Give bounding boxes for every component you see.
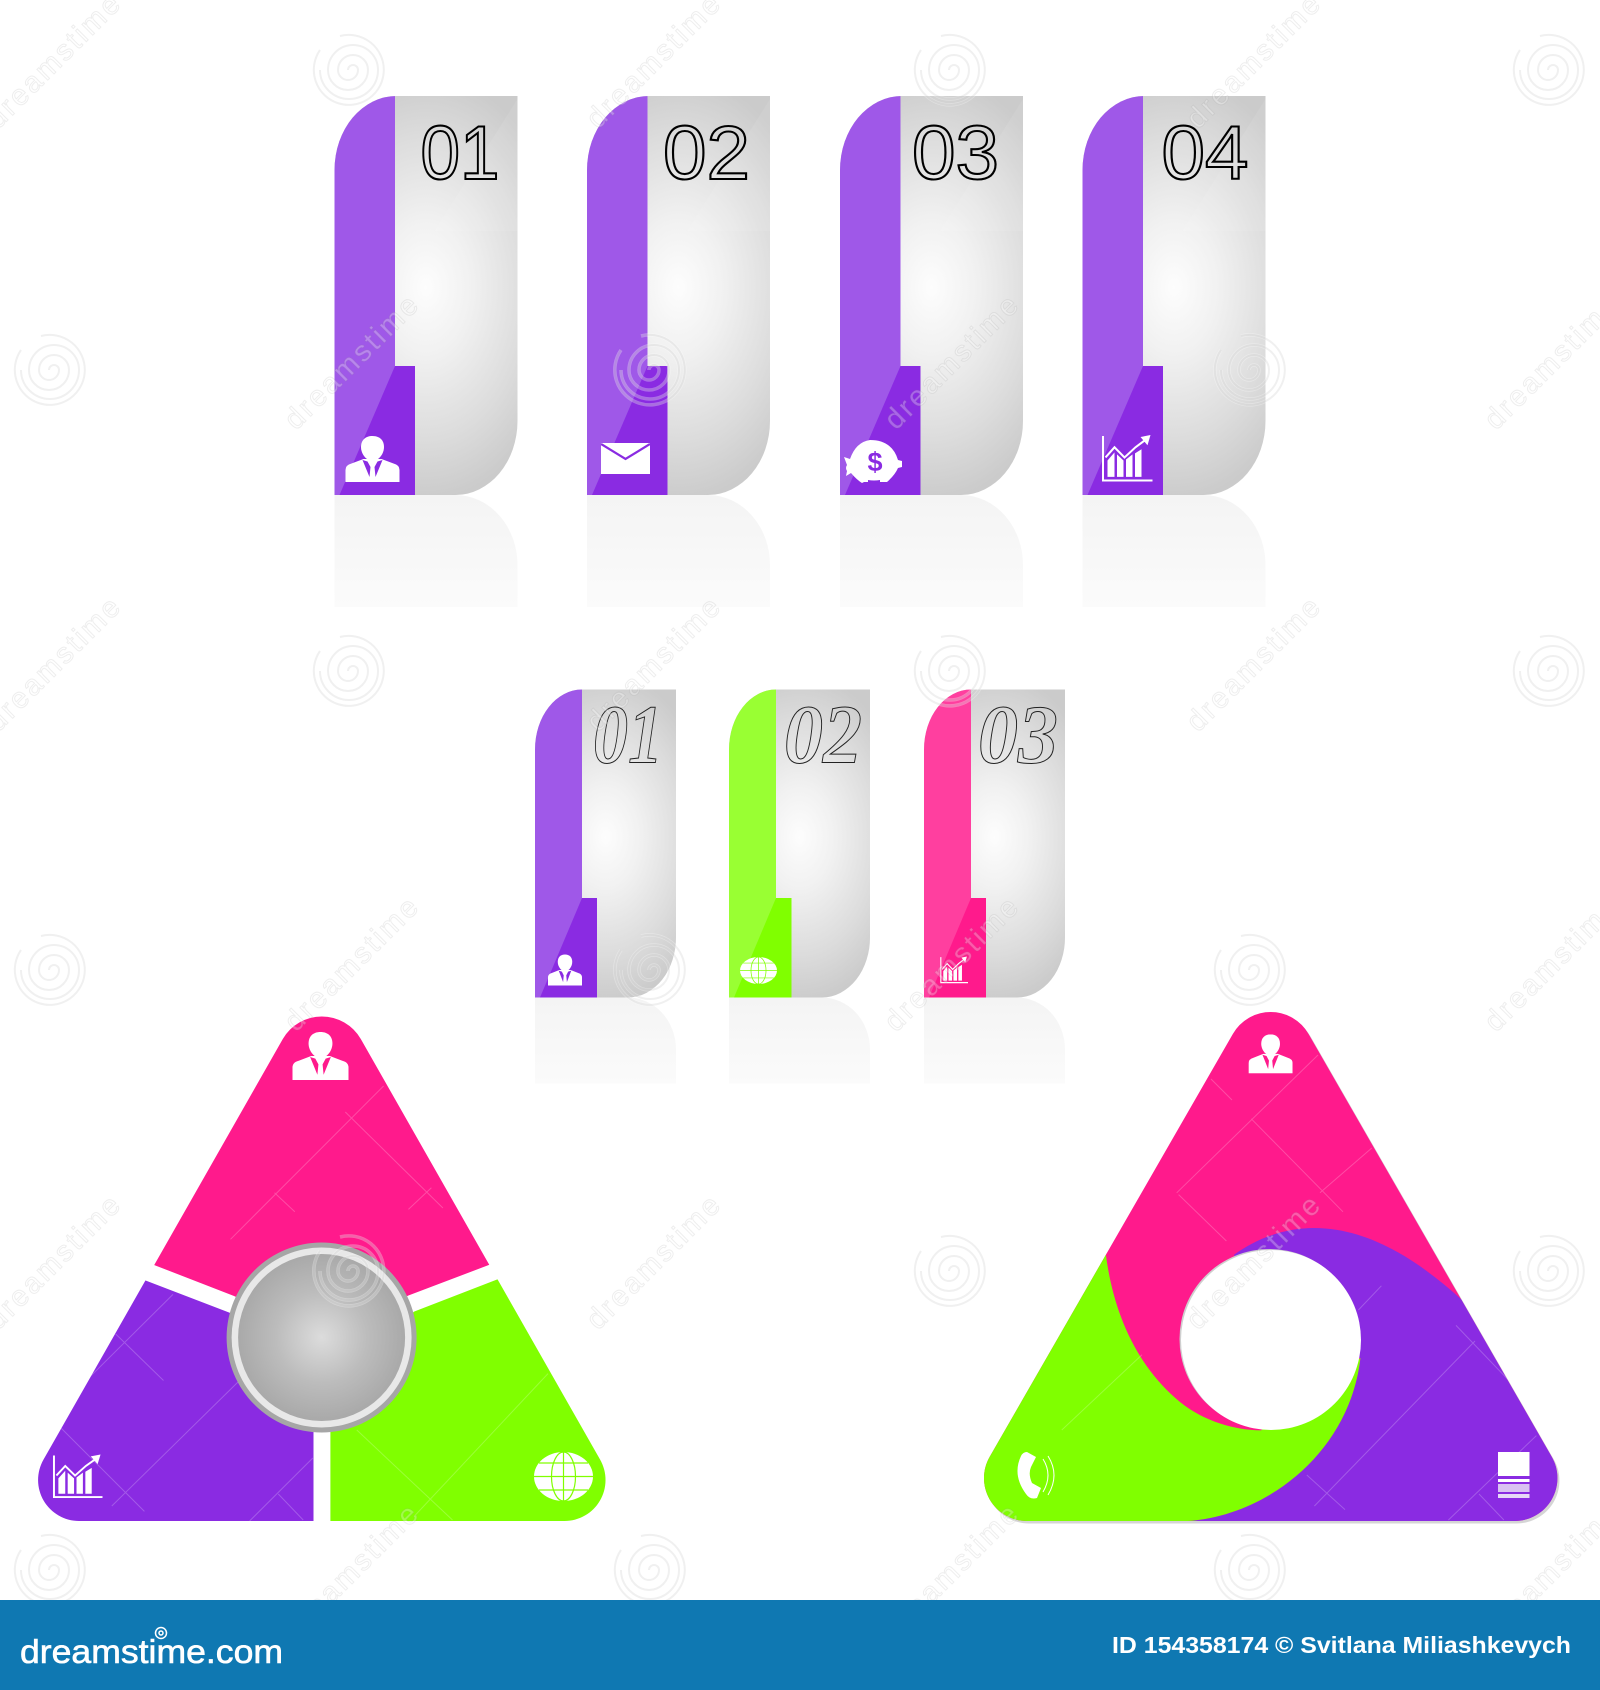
card reflection <box>587 495 770 607</box>
card reflection <box>334 495 518 607</box>
number: 01 <box>420 111 500 196</box>
panel: segmented triangle <box>38 1016 606 1521</box>
card colour strip <box>840 96 920 495</box>
card colour strip <box>1082 96 1163 495</box>
card glass body <box>924 690 1065 998</box>
footer logo spiral <box>156 1628 166 1638</box>
number: 02 <box>784 688 862 782</box>
card colour strip <box>535 690 597 998</box>
icon: piggy bank: $ <box>867 447 883 477</box>
panel: small card 03 <box>924 690 1065 1034</box>
panel: swirl triangle <box>984 1012 1560 1524</box>
icon: tablet <box>1498 1452 1530 1498</box>
watermark spirals and text: dreamstime <box>878 892 1025 1038</box>
card glass body <box>587 96 770 495</box>
number: 03 <box>978 688 1058 782</box>
card colour strip <box>587 96 668 495</box>
card gloss <box>940 99 1023 231</box>
watermark spirals and text: dreamstime <box>580 1190 727 1336</box>
card glass body <box>840 96 1023 495</box>
card reflection <box>729 998 870 1084</box>
number: 03 <box>912 111 999 196</box>
icon: globe <box>534 1452 593 1501</box>
watermark spirals and text: dreamstime <box>278 1499 425 1645</box>
card colour strip <box>729 690 792 998</box>
centre grey circle <box>227 1242 417 1432</box>
icon: piggy bank <box>844 440 902 483</box>
icon: phone <box>1017 1452 1054 1498</box>
card gloss <box>1182 99 1266 231</box>
card glass body <box>729 690 870 998</box>
watermark spirals and text: dreamstime <box>278 290 425 436</box>
footer logo: dreamstime.com <box>20 1633 283 1670</box>
icon: person <box>292 1032 348 1080</box>
card glass body <box>334 96 518 495</box>
number: 04 <box>1162 111 1248 196</box>
panel: large card 03 <box>840 96 1023 542</box>
icon: envelope <box>601 443 650 474</box>
icon: globe <box>740 957 777 984</box>
panel: large card 01 <box>334 96 518 542</box>
number: 01 <box>593 688 663 782</box>
footer credit: ID 154358174 © Svitlana Miliashkevych <box>1112 1632 1571 1658</box>
card reflection <box>840 495 1023 607</box>
card glass body <box>535 690 676 998</box>
icon: person <box>1249 1034 1293 1073</box>
triangle soft shadow <box>986 1015 1559 1524</box>
icon: bar chart <box>54 1454 102 1497</box>
swirl segments <box>984 1012 1558 1521</box>
centre hole <box>1180 1249 1361 1430</box>
triangle segments <box>38 1016 606 1521</box>
watermark spirals and text: dreamstime <box>878 290 1025 436</box>
panel: small card 02 <box>729 690 870 1034</box>
icon: bar chart <box>941 956 968 983</box>
number: 02 <box>663 111 750 196</box>
panel: large card 04 <box>1082 96 1266 542</box>
card gloss <box>687 99 770 231</box>
icon: person <box>548 954 582 986</box>
panel: large card 02 <box>587 96 770 542</box>
icon: person <box>346 436 400 482</box>
watermark spirals and text: dreamstime <box>878 1499 1025 1645</box>
watermark spirals and text: dreamstime <box>580 592 727 738</box>
card colour strip <box>924 690 986 998</box>
footer bar <box>0 1600 1600 1690</box>
card colour strip <box>334 96 415 495</box>
card gloss <box>434 99 518 231</box>
card reflection <box>1082 495 1266 607</box>
watermark spirals and text: dreamstime <box>1180 1190 1327 1336</box>
panel: small card 01 <box>535 690 676 1034</box>
watermark spirals and text: dreamstime <box>1180 592 1327 738</box>
card reflection <box>924 998 1065 1084</box>
watermark spirals and text: dreamstime <box>278 892 425 1038</box>
card glass body <box>1082 96 1266 495</box>
card reflection <box>535 998 676 1084</box>
icon: bar chart <box>1103 435 1152 480</box>
